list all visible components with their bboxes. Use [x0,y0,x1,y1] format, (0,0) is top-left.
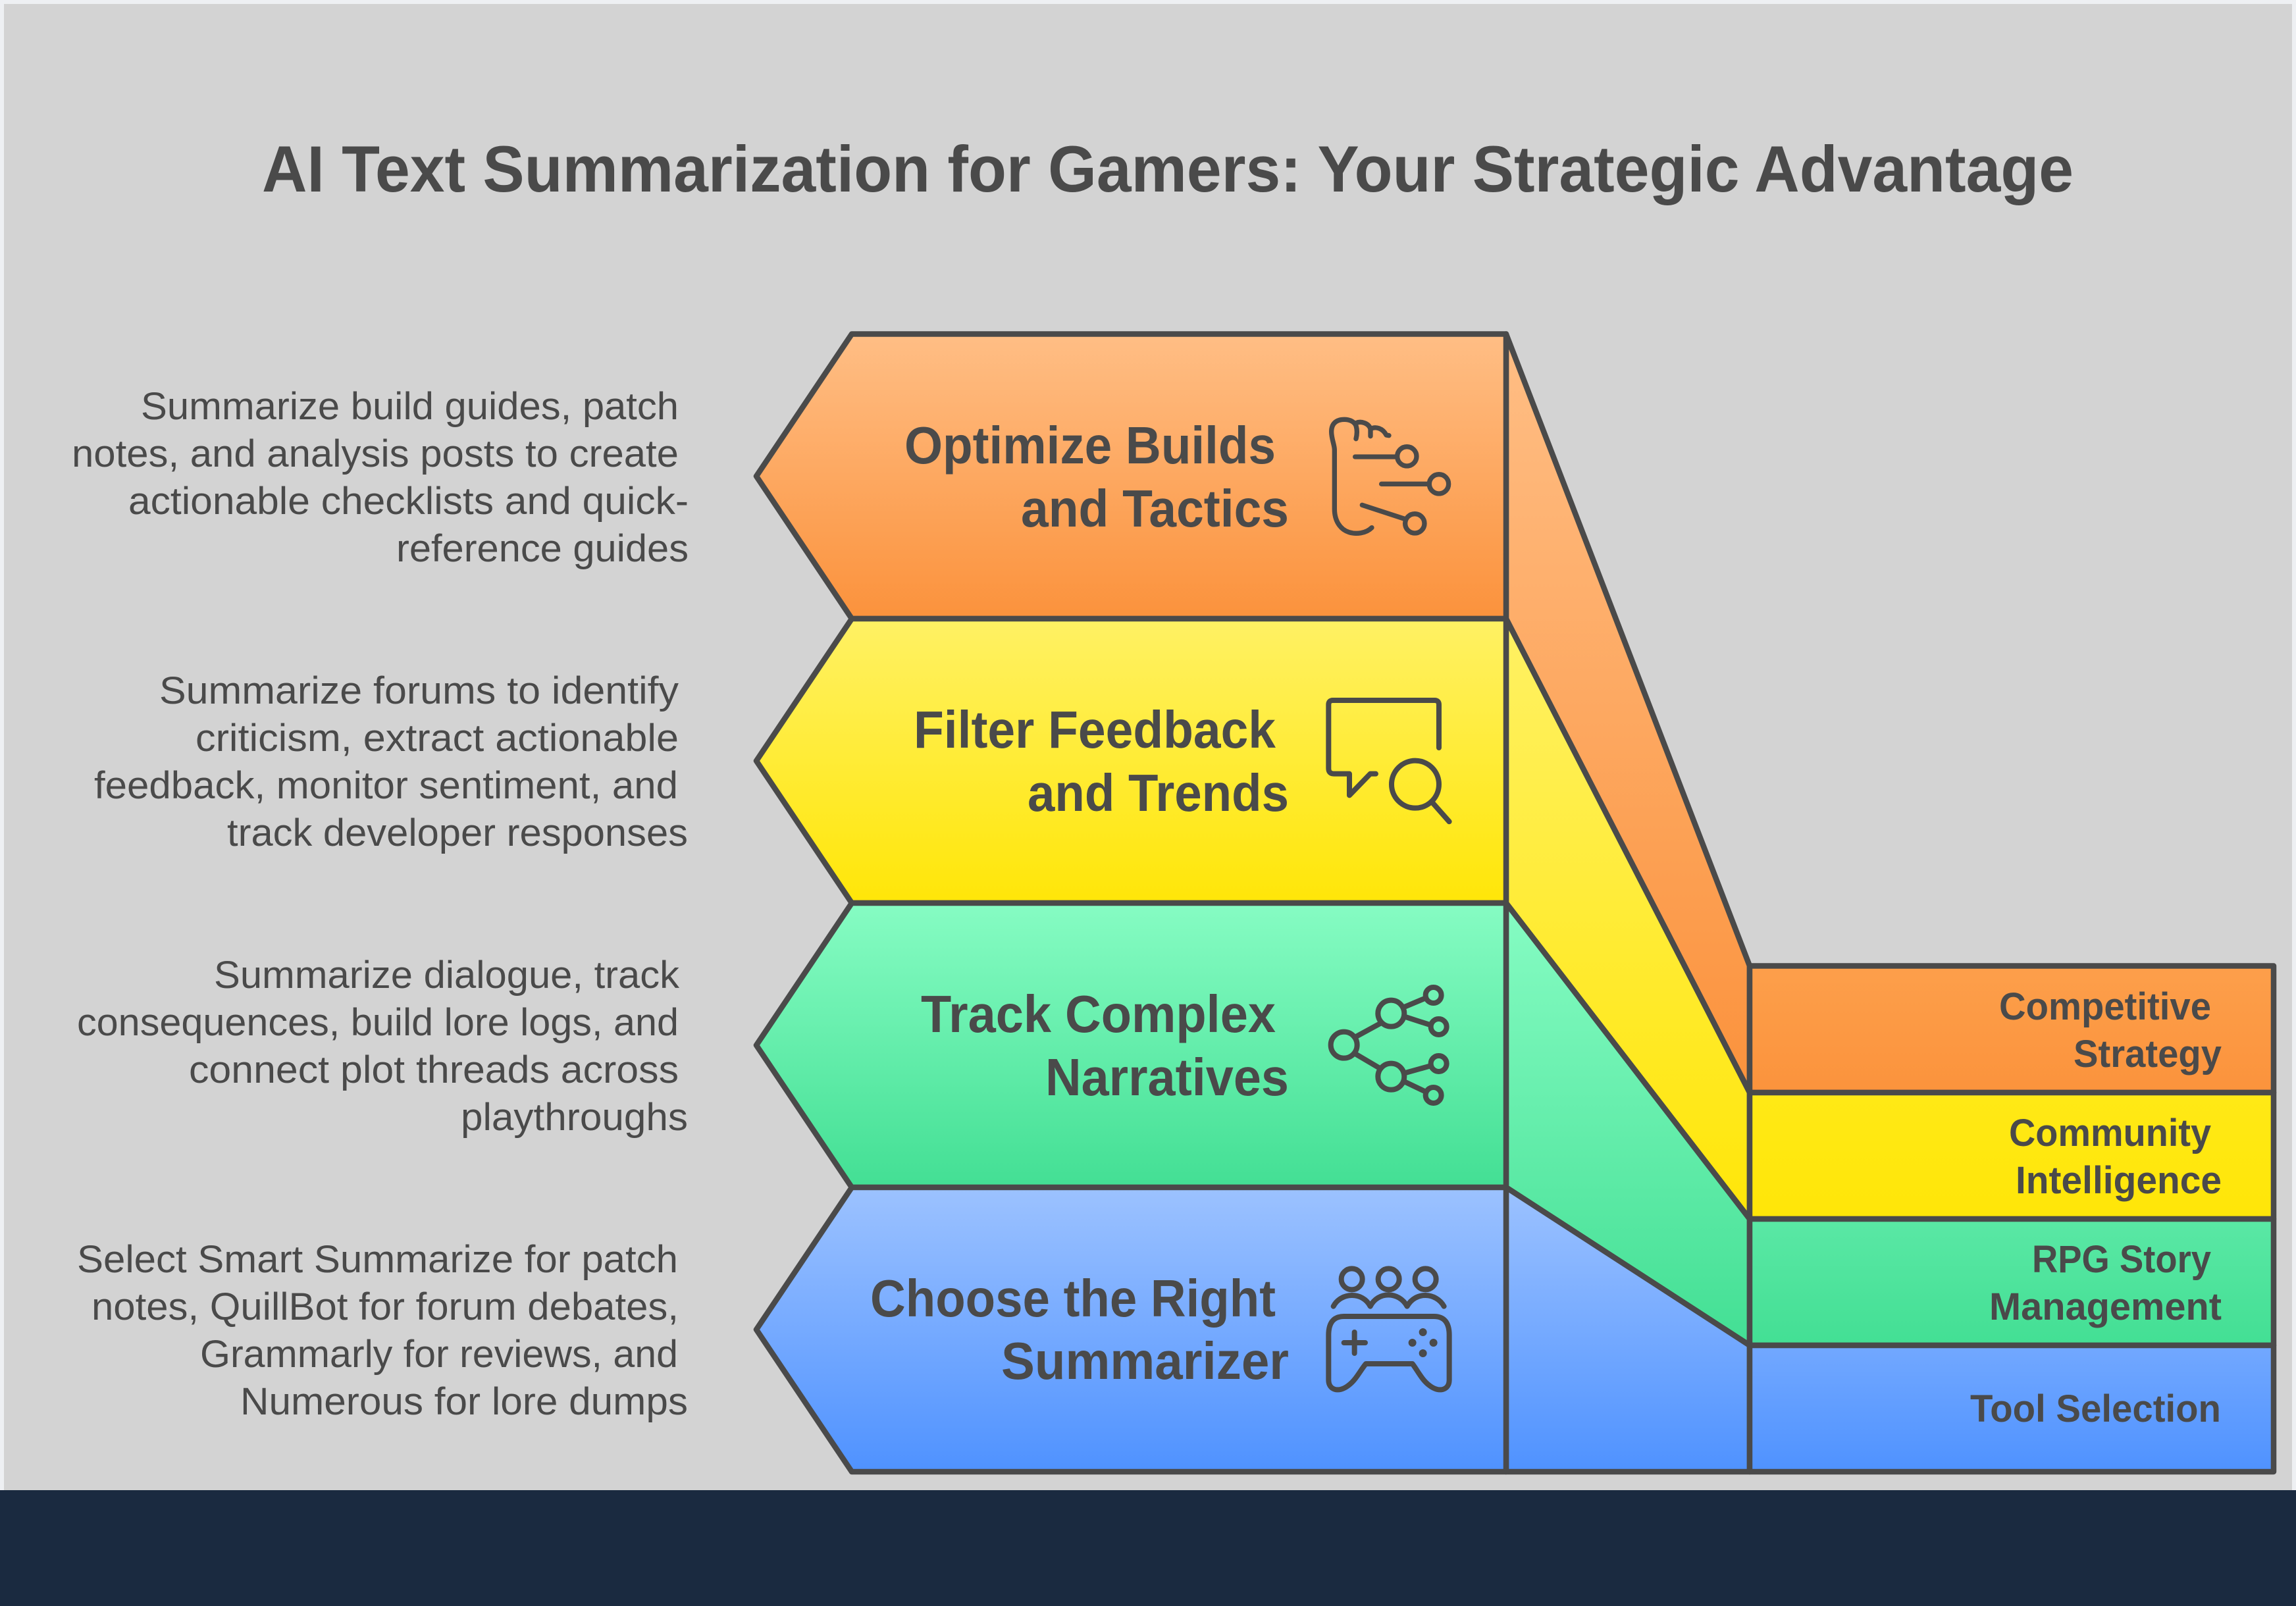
panel: competitive strategy: Strategy [2074,1033,2222,1075]
text block: choose summarizer description: Numerous for lore dumps [240,1380,688,1423]
text block: track narratives description [77,954,688,1139]
panel: track complex narratives [756,903,1506,1187]
panel: optimize builds and tactics: and Tactics [1021,479,1289,538]
connector: orange [1506,334,1750,1093]
text block: track narratives description: Summarize dialogue, track [214,954,680,997]
text block: filter feedback description: feedback, monitor sentiment, and [94,764,678,807]
icon: branching nodes [1331,987,1447,1103]
text block: optimize builds description: Summarize build guides, patch [141,385,679,428]
text block: track narratives description: connect plot threads across [189,1049,679,1091]
text block: filter feedback description: criticism, extract actionable [196,717,679,760]
panel: filter feedback and trends [756,619,1506,903]
title: AI Text Summarization for Gamers: Your Strategic Advantage [262,132,2074,205]
panel: rpg story management [1750,1219,2274,1345]
panel: optimize builds and tactics: Optimize Builds [904,416,1276,475]
text block: optimize builds description [72,385,689,570]
panel: rpg story management: Management [1989,1285,2222,1328]
panel: choose the right summarizer [756,1187,1506,1472]
connector: yellow [1506,619,1750,1219]
text block: filter feedback description: track developer responses [227,812,688,854]
text block: track narratives description: playthroughs [461,1096,688,1139]
panel: community intelligence [1750,1093,2274,1219]
connector bands [1506,334,1750,1472]
panel: tool selection [1750,1345,2274,1472]
text block: optimize builds description: actionable checklists and quick- [128,480,689,523]
panel: track complex narratives: Narratives [1045,1048,1289,1106]
text block: filter feedback description [94,669,688,854]
text block: choose summarizer description: Select Smart Summarize for patch [77,1238,678,1281]
panel: community intelligence: Intelligence [2016,1159,2222,1202]
text block: choose summarizer description [77,1238,688,1423]
text block: optimize builds description: notes, and analysis posts to create [72,432,679,475]
panel: competitive strategy: Competitive [1999,985,2211,1028]
panel: choose the right summarizer: Choose the Right [870,1269,1276,1328]
panel: tool selection: Tool Selection [1970,1387,2221,1430]
panel: choose the right summarizer: Summarizer [1001,1332,1289,1390]
icon: hand with nodes [1332,419,1449,533]
panel: filter feedback and trends: Filter Feedback [914,700,1276,759]
text block: filter feedback description: Summarize forums to identify [159,669,679,712]
panel: filter feedback and trends: and Trends [1028,764,1289,822]
text block: choose summarizer description: Grammarly for reviews, and [200,1333,678,1376]
icon: players and game controller [1328,1268,1449,1389]
panel: competitive strategy [1750,966,2274,1093]
panel: rpg story management: RPG Story [2032,1238,2211,1281]
text block: optimize builds description: reference guides [396,527,689,570]
connector: blue [1506,1187,1750,1472]
footer band [0,1490,2296,1606]
panel: track complex narratives: Track Complex [921,985,1276,1043]
text block: track narratives description: consequences, build lore logs, and [77,1001,679,1044]
text block: choose summarizer description: notes, QuillBot for forum debates, [91,1285,679,1328]
connector: green [1506,903,1750,1345]
panel: optimize builds and tactics [756,334,1506,619]
panel: community intelligence: Community [2009,1112,2211,1154]
icon: speech bubble with magnifier [1328,700,1449,821]
